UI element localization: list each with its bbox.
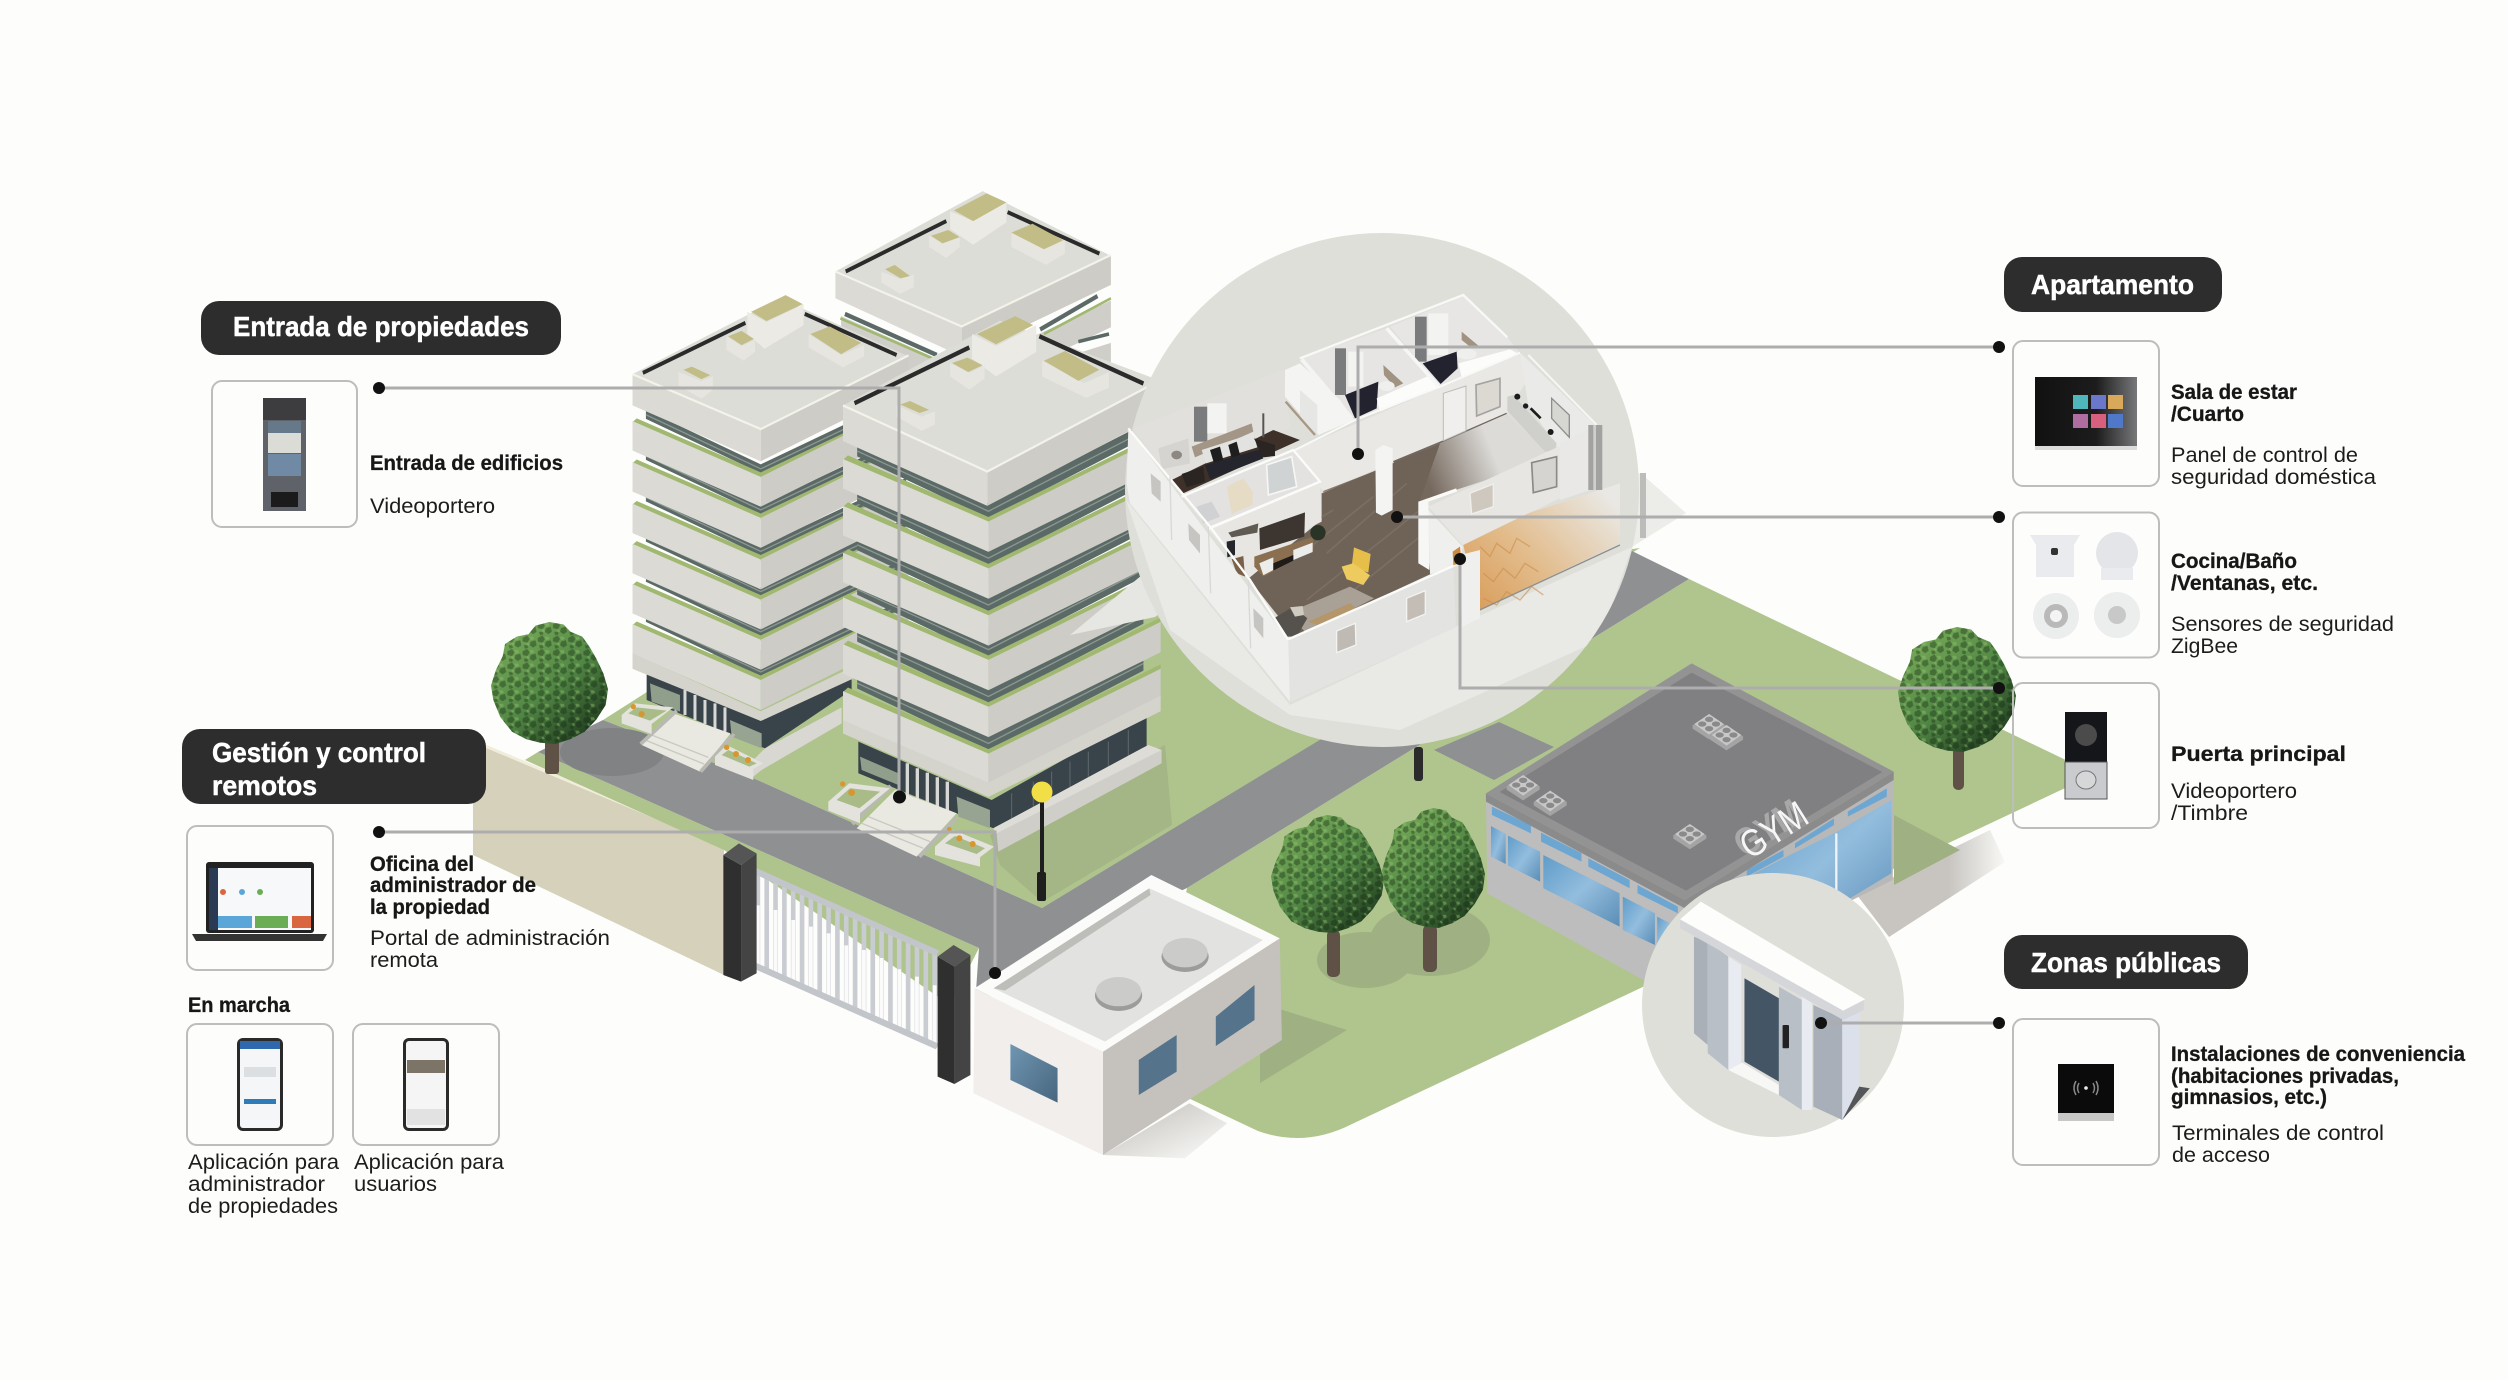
- terrace extending out of the circle: [1560, 440, 1686, 570]
- corridor wall: [1295, 353, 1527, 492]
- text: amenities: (habitaciones privadas,: [2171, 1065, 2399, 1088]
- branch road to gym: [1434, 722, 1554, 780]
- text: building entrance: Entrada de edificios: [370, 452, 563, 475]
- leader line: front door: [1454, 553, 2005, 694]
- guard house: [973, 875, 1282, 1158]
- rooftop units: [1507, 775, 1540, 800]
- text: front door: Videoportero: [2171, 780, 2297, 803]
- stacked floors: [843, 656, 1161, 784]
- device card: laptop portal: [187, 826, 333, 970]
- text: property office: Portal de administración: [370, 927, 610, 950]
- text: manager app: administrador: [188, 1173, 325, 1196]
- gym sign: GYM: [1727, 792, 1810, 866]
- text: kitchen, bath and windows: ZigBee: [2171, 635, 2238, 658]
- right lawn: [1150, 579, 2095, 1138]
- text: property office: [370, 853, 610, 972]
- panel: apartment: [2004, 257, 2394, 828]
- leader line: kitchen and bath: [1391, 511, 2005, 523]
- device card: home control panel: [2013, 341, 2159, 486]
- device card: ZigBee sensors: [2013, 512, 2159, 658]
- parquet hall and partitions: [1418, 425, 1620, 611]
- text: living room: [2171, 381, 2376, 489]
- storage wall: [1520, 353, 1595, 448]
- stacked floors: [633, 598, 908, 710]
- leader line: building entrance: [373, 382, 906, 804]
- text: amenities: de acceso: [2172, 1144, 2270, 1167]
- text: property office: administrador de: [370, 874, 536, 897]
- door: [1744, 978, 1779, 1082]
- text: front door: [2171, 743, 2346, 825]
- heading: [2004, 257, 2222, 312]
- text: front door: Puerta principal: [2171, 743, 2346, 766]
- exterior walls: [1127, 428, 1456, 702]
- roof: [843, 405, 987, 506]
- left bedroom: [1133, 370, 1290, 481]
- apartment floor plan: [1126, 295, 1646, 730]
- building: back tower: [835, 191, 1111, 430]
- parquet: [1463, 483, 1620, 611]
- text: user app: Aplicación para: [354, 1151, 504, 1174]
- text: building entrance: [370, 452, 563, 518]
- heading: remotos: [212, 770, 317, 801]
- road shadow band beside the gym: [1857, 830, 2005, 937]
- front tower ground floor and entrance: [828, 713, 1162, 867]
- text: amenities: Terminales de control: [2172, 1122, 2384, 1145]
- windows: [1010, 1044, 1058, 1103]
- text: living room: seguridad doméstica: [2171, 466, 2376, 489]
- gym sign: GYM: [1733, 794, 1816, 868]
- text: kitchen, bath and windows: [2171, 550, 2394, 658]
- wood floor: [1248, 443, 1440, 637]
- device card: user app: [353, 1024, 499, 1145]
- text: living room: Panel de control de: [2171, 444, 2358, 467]
- text: manager app: de propiedades: [188, 1195, 338, 1218]
- text: manager app: Aplicación para: [188, 1151, 339, 1174]
- text: manager app: [188, 1151, 339, 1218]
- text: front door: /Timbre: [2171, 802, 2248, 825]
- device card: manager app: [187, 1024, 333, 1145]
- text: property office: Oficina del: [370, 853, 474, 876]
- text: amenities: Instalaciones de conveniencia: [2171, 1043, 2465, 1066]
- bedroom three: [1390, 297, 1520, 386]
- front wall: [1288, 567, 1456, 702]
- text: amenities: [2171, 1043, 2465, 1167]
- pillar: [1375, 445, 1393, 516]
- pillar and side wall: [1428, 510, 1463, 574]
- text: kitchen, bath and windows: /Ventanas, etc.: [2171, 572, 2318, 595]
- second lamp post: [1414, 747, 1423, 781]
- canopy: [1680, 920, 1864, 1020]
- front wall end column: [1460, 550, 1480, 627]
- text: property office: la propiedad: [370, 896, 490, 919]
- TV wall: [1208, 483, 1322, 577]
- gym building: [1486, 663, 1894, 1007]
- corridor floor: [1393, 413, 1547, 502]
- text: kitchen, bath and windows: Cocina/Baño: [2171, 550, 2297, 573]
- left glazing: [1492, 807, 1531, 833]
- panel: public areas: [2004, 935, 2465, 1167]
- perimeter wall: [473, 741, 724, 975]
- street lamp: [1032, 782, 1052, 901]
- gate post left: [723, 855, 741, 982]
- text: building entrance: Videoportero: [370, 495, 495, 518]
- bathroom: [1182, 450, 1320, 528]
- panel: property entrance: [201, 301, 563, 527]
- rug and sofa: [1287, 587, 1374, 633]
- upper rooms: [1295, 295, 1597, 502]
- detail callout: apartment circle: [1070, 233, 1686, 747]
- right glazing: [1742, 800, 1891, 940]
- text: amenities: gimnasios, etc.): [2171, 1086, 2327, 1109]
- text: living room: /Cuarto: [2171, 403, 2244, 426]
- tree shadow on road: [560, 728, 664, 776]
- building shadow on lawn: [990, 745, 1172, 902]
- closet: [1285, 363, 1354, 435]
- tree: left of wall: [491, 622, 608, 774]
- bedroom two: [1300, 328, 1440, 422]
- armchair: [1342, 547, 1371, 585]
- green strip along the wall: [525, 752, 979, 1005]
- heading: Apartamento: [2031, 269, 2194, 300]
- heading: [182, 729, 486, 804]
- text: kitchen, bath and windows: Sensores de seguridad: [2171, 613, 2394, 636]
- terrace post: [1588, 425, 1602, 490]
- device card: building intercom: [212, 381, 357, 527]
- gate post right: [938, 957, 954, 1084]
- tree: right of gym: [1898, 627, 2016, 790]
- heading: [2004, 935, 2248, 989]
- roof: [1486, 772, 1894, 908]
- device card: door station: [2013, 683, 2159, 828]
- heading: Zonas públicas: [2031, 947, 2221, 978]
- device card: access terminal: [2013, 1019, 2159, 1165]
- heading: Entrada de propiedades: [233, 311, 529, 342]
- entrance gate: [723, 843, 970, 1084]
- bars: [758, 872, 935, 1047]
- ground: lawns, roads and perimeter wall: [473, 548, 2095, 1138]
- tree: centre left: [1271, 815, 1384, 977]
- heading: [201, 301, 561, 355]
- text: user app: [354, 1151, 504, 1196]
- text: living room: Sala de estar: [2171, 381, 2297, 404]
- text: user app: usuarios: [354, 1173, 437, 1196]
- lower-left rooms: [1133, 363, 1440, 637]
- building: left tower: [633, 295, 908, 721]
- leader line: remote management: [373, 826, 1001, 979]
- lower partition wall: [1428, 446, 1560, 545]
- access reader: [1783, 1025, 1789, 1048]
- lawn shadows: [1260, 815, 1960, 1083]
- subheading: on the go: En marcha: [188, 994, 290, 1017]
- heading: Gestión y control: [212, 737, 426, 768]
- roof: [633, 374, 761, 461]
- pale ground under the apartment: [1126, 500, 1632, 730]
- text: property office: remota: [370, 949, 438, 972]
- terrace post: [1640, 473, 1646, 538]
- roof vents: [1162, 941, 1209, 972]
- building: front tower: [843, 316, 1161, 797]
- tree: centre right: [1382, 808, 1485, 972]
- panel: remote management: [182, 729, 610, 1218]
- left wall: [1127, 428, 1290, 702]
- entrance door detail: [1680, 902, 1870, 1120]
- building lawn: [603, 548, 1640, 908]
- detail callout: access door circle: [1642, 873, 1904, 1137]
- left tower ground floor and entrance: [622, 670, 852, 780]
- leader line: living room: [1352, 341, 2005, 460]
- main road: [538, 551, 1689, 1005]
- leader line: public areas: [1815, 1017, 2005, 1029]
